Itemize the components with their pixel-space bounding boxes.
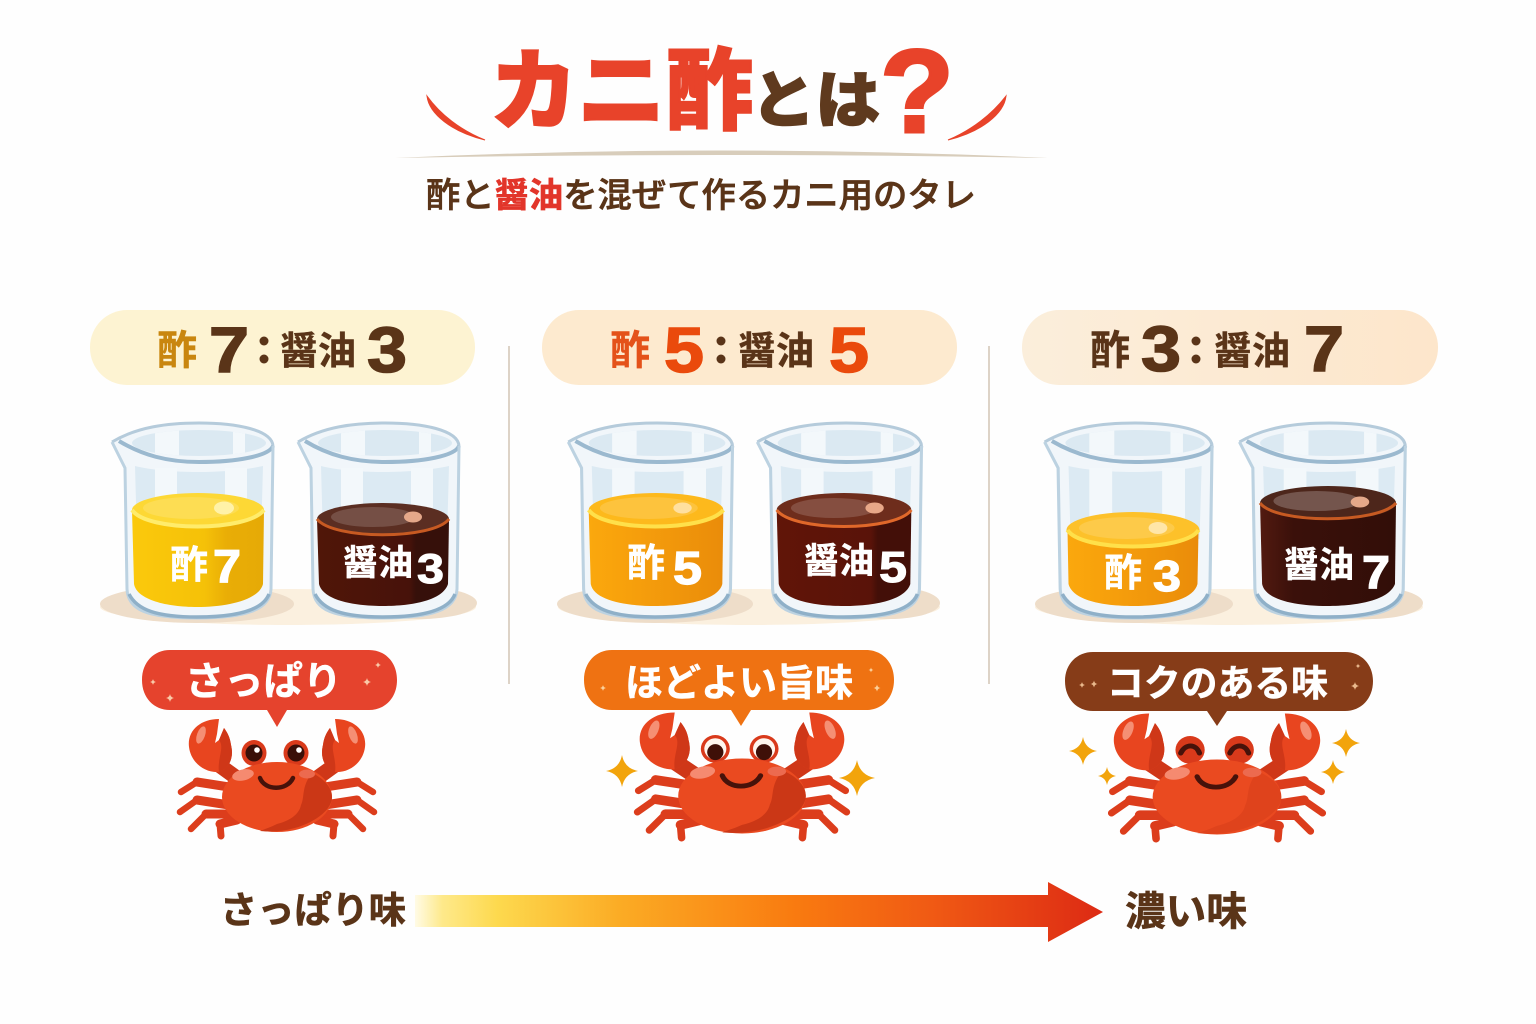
crab 3: [1111, 714, 1323, 839]
beaker label: soy 5: 5: [879, 543, 907, 592]
beaker label: soy 7: [1284, 546, 1390, 598]
beaker label: vinegar 7: 酢: [170, 545, 208, 587]
table shadow 2: [557, 585, 940, 625]
ratio pill 2: 醤油: [738, 331, 814, 373]
beaker: vinegar 7: [112, 423, 273, 618]
crab 2: [637, 713, 847, 838]
ratio pill 2: [542, 310, 957, 386]
beaker: soy sauce 5: [757, 423, 922, 618]
title: とは: とは: [751, 67, 880, 136]
beaker label: vinegar 5: 5: [673, 542, 702, 594]
beaker: soy sauce 3: [298, 423, 459, 618]
bubble: light taste: さっぱり: [185, 661, 342, 704]
beaker label: soy 5: [804, 542, 907, 592]
beaker label: soy 3: [343, 544, 444, 592]
beaker label: soy 5: 醤油: [804, 542, 874, 581]
table shadow 1: [100, 585, 477, 625]
title: main text: カニ酢: [490, 42, 753, 141]
table shadow 3: [1035, 585, 1423, 625]
ratio pill 3: 3: [1141, 313, 1181, 385]
scale label: light: さっぱり味: [220, 890, 406, 931]
beaker: soy sauce 7: [1239, 423, 1405, 618]
beaker: vinegar 3: [1045, 423, 1212, 618]
crab 1: [180, 719, 374, 836]
beaker label: soy 7: 醤油: [1284, 546, 1354, 585]
beaker label: vinegar 7: 7: [213, 540, 241, 592]
ratio pill 1: 7: [209, 314, 249, 386]
beaker label: soy 7: 7: [1362, 546, 1390, 598]
ratio pill 2: 5: [664, 314, 704, 386]
gradient arrow: [415, 882, 1103, 942]
ratio pill 1: 3: [367, 314, 407, 386]
beaker label: soy 3: 醤油: [343, 544, 413, 583]
ratio pill 2: 5: [829, 314, 869, 386]
ratio pill 1: [90, 310, 475, 386]
ratio pill 3: 7: [1304, 313, 1344, 385]
panel: vinegar 5 soy 5: [542, 310, 957, 838]
beaker label: vinegar 3: 3: [1153, 552, 1181, 601]
beaker label: soy 3: 3: [417, 545, 444, 592]
bubble: balanced taste: [584, 650, 894, 726]
title swoosh left: [427, 96, 485, 140]
title swoosh right: [948, 96, 1006, 140]
ratio pill 3: 醤油: [1214, 331, 1290, 373]
ratio pill 3: 酢: [1090, 329, 1130, 373]
beaker label: vinegar 5: 酢: [627, 543, 665, 585]
sparkles crab 2: [606, 755, 875, 796]
bubble: balanced taste: ほどよい旨味: [625, 663, 853, 705]
panel: vinegar 3 soy 7: [1022, 310, 1438, 839]
ratio pill 1: 醤油: [280, 331, 356, 373]
beaker: vinegar 5: [568, 423, 733, 618]
ratio pill 2: 酢: [610, 329, 650, 373]
beaker label: vinegar 3: 酢: [1104, 553, 1142, 595]
bubble: rich taste: コクのある味: [1107, 663, 1328, 704]
ratio pill 1: 酢: [157, 329, 197, 373]
sparkles crab 3: [1069, 729, 1360, 785]
title: [490, 26, 954, 158]
beaker label: vinegar 7: [170, 540, 241, 592]
beaker label: vinegar 5: [627, 542, 702, 594]
title: question mark: ?: [880, 26, 954, 158]
beaker label: vinegar 3: [1104, 552, 1181, 601]
ratio pill 3: [1022, 310, 1438, 385]
scale label: rich: 濃い味: [1125, 890, 1247, 934]
bubble: rich taste: [1065, 652, 1373, 726]
bubble: light taste: [142, 650, 397, 727]
subtitle: 酢と醤油を混ぜて作るカニ用のタレ: [426, 177, 976, 215]
panel: vinegar 7 soy 3: [90, 310, 477, 836]
